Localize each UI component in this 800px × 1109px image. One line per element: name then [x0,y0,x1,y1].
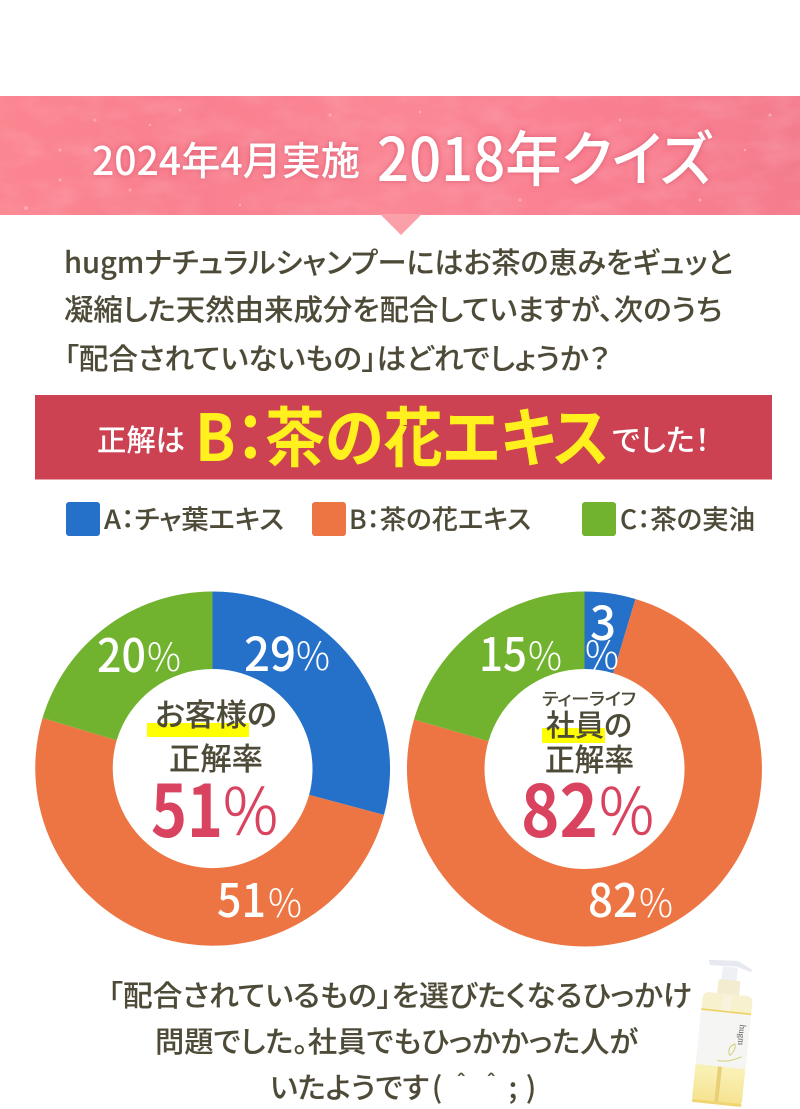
label 51% [217,865,302,931]
center label: employees: 82 [521,753,598,858]
closing remark: 「配合されているもの」を選びたくなるひっかけ [108,973,692,1015]
closing remark: ＾ [480,1069,502,1101]
label 82%: % [639,873,673,929]
label 20%: 20 [97,620,146,686]
center label: customers: 51 [151,753,223,858]
bottle brand name: hugm [736,1024,748,1046]
donut chart: customers [35,592,390,946]
question text: 凝縮した天然由来成分を配合していますが、次のうち [64,287,722,329]
closing remark: ( [432,1065,442,1107]
label 15%: 15 [479,619,527,685]
label 51%: 51 [217,865,266,931]
label 20% [97,620,181,686]
label 3%: % [585,625,619,681]
label 3%: 3 [590,585,616,654]
answer banner [35,386,772,480]
closing remark: ; [509,1065,517,1107]
center label: employees [521,685,654,858]
label 82% [588,865,673,931]
center label: employees: % [599,761,654,853]
label 29% [244,616,330,685]
label 15%: % [528,626,562,682]
closing remark: 問題でした。社員でもひっかかった人が [155,1019,639,1061]
center label: employees: 正解率 [545,735,634,780]
closing remark [108,973,692,1107]
answer: B 茶の花エキス: B：茶の花エキス [195,386,609,480]
center label: customers [147,690,278,858]
heading: date: 2024年4月実施 [92,131,360,187]
question text [64,240,733,378]
label 20%: % [147,627,181,683]
label 82%: 82 [588,865,638,931]
answer lead-in: 正解は [97,416,185,460]
legend [66,498,755,537]
center label: customers: 正解率 [169,734,263,779]
donut chart: employees [407,585,762,947]
label 29%: % [296,626,330,682]
heading: quiz title: 2018年クイズ [377,112,713,199]
answer suffix: でした！ [612,416,710,460]
closing remark: いたようです [270,1065,429,1107]
label 51%: % [268,873,302,929]
question text: 「配合されていないもの」はどれでしょうか？ [64,336,610,378]
icon: shampoo bottle [692,958,757,1107]
center label: customers: お客様の [155,690,277,735]
center label: employees: 社員の [546,701,632,745]
legend item C: C：茶の実油 [620,498,755,537]
legend item B: B：茶の花エキス [349,498,531,537]
label 15% [479,619,562,685]
closing remark: ) [526,1065,536,1107]
question text: hugmナチュラルシャンプーにはお茶の恵みをギュッと [64,240,733,282]
closing remark: ＾ [450,1069,472,1101]
label 3% [585,585,619,681]
label 29%: 29 [244,616,296,685]
center label: customers: % [223,761,278,853]
center label: employees: ティーライフ [542,685,636,710]
banner: quiz heading [0,96,800,235]
legend item A: A：チャ葉エキス [104,498,284,537]
